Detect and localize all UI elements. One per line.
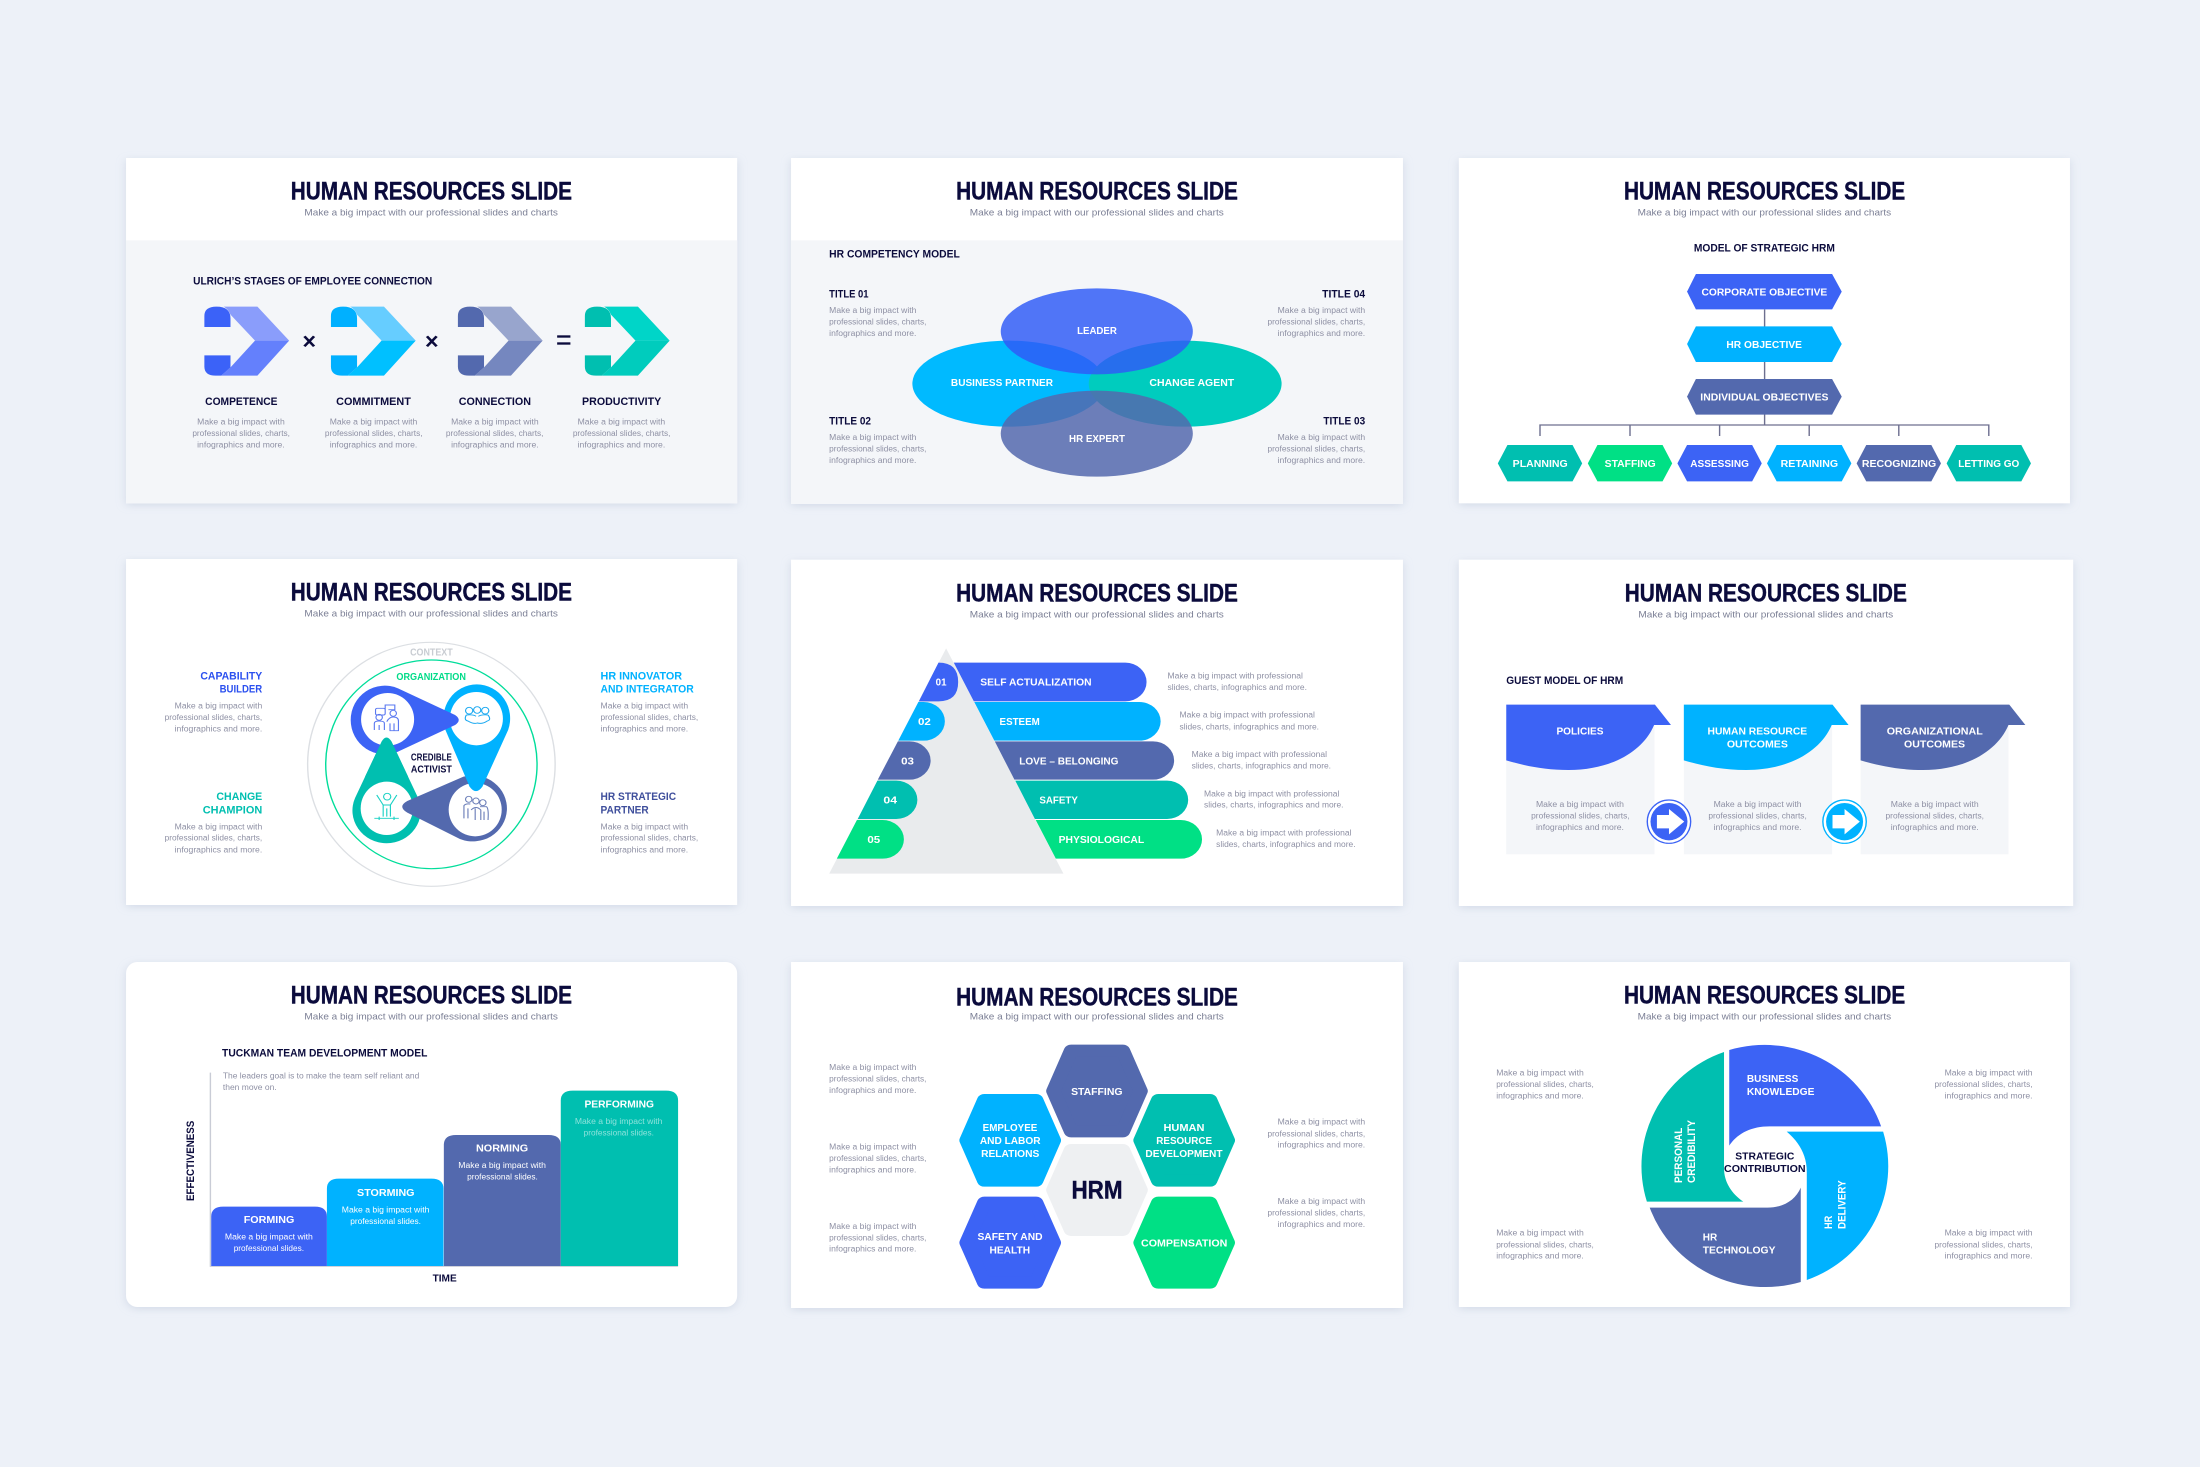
- bar: performing: professional slides.: [584, 1128, 654, 1137]
- panel: strategic contribution pinwheel: [1459, 962, 2070, 1307]
- organization label: ORGANIZATION: [396, 672, 466, 683]
- row 05 physiological: [837, 820, 1356, 859]
- icon: competence arrow: [204, 307, 289, 376]
- segment: HR delivery: HR: [1823, 1216, 1835, 1229]
- card: human resource outcomes: professional slides, charts,: [1708, 811, 1807, 820]
- left text 3: infographics and more.: [829, 1244, 916, 1253]
- commitment text: COMMITMENT: [336, 395, 412, 408]
- subtitle: Make a big impact with our professional slides and charts: [304, 208, 558, 218]
- HR strategic partner block: [601, 790, 698, 854]
- connection text: Make a big impact with: [451, 417, 539, 426]
- context ring: [308, 642, 555, 886]
- competence text: COMPETENCE: [205, 395, 278, 408]
- capability builder block: professional slides, charts,: [165, 713, 262, 722]
- change champion block: [165, 790, 262, 854]
- hexagon: human resource development: DEVELOPMENT: [1145, 1149, 1223, 1160]
- change champion block: Make a big impact with: [175, 822, 262, 831]
- bar: forming: FORMING: [244, 1215, 294, 1226]
- title: HUMAN RESOURCES SLIDE: [291, 981, 572, 1009]
- left text 3: [829, 1222, 926, 1253]
- center label: ACTIVIST: [411, 764, 452, 775]
- bar: storming: [327, 1179, 443, 1266]
- slide background: [1459, 560, 2073, 906]
- hexagon: employee and labor relations: RELATIONS: [981, 1149, 1040, 1160]
- venn diagram: BUSINESS PARTNER: [951, 378, 1054, 389]
- title 03 block: [1268, 414, 1366, 465]
- top right text: Make a big impact with: [1945, 1068, 2033, 1077]
- connection text: [446, 395, 543, 449]
- capability builder block: CAPABILITY: [200, 670, 262, 682]
- row 03 love and belonging: 03: [901, 756, 914, 767]
- y axis label: EFFECTIVENESS: [185, 1120, 197, 1201]
- segment: HR technology: TECHNOLOGY: [1703, 1246, 1776, 1256]
- bottom right text: [1935, 1228, 2033, 1260]
- context label: CONTEXT: [410, 647, 453, 658]
- right text 1: [1268, 1117, 1365, 1149]
- segment: personal credibility: [1641, 1052, 1743, 1202]
- grey content band: [791, 240, 1403, 504]
- letting go box: [1947, 445, 2031, 481]
- row 04 safety: [858, 781, 1343, 819]
- top right text: infographics and more.: [1945, 1091, 2033, 1100]
- title 02 block: infographics and more.: [829, 456, 916, 465]
- commitment text: [325, 395, 423, 449]
- top left text: Make a big impact with: [1496, 1068, 1584, 1077]
- title: HUMAN RESOURCES SLIDE: [956, 177, 1238, 205]
- title 02 block: professional slides, charts,: [829, 444, 926, 453]
- corporate objective box: CORPORATE OBJECTIVE: [1702, 288, 1828, 298]
- card: organizational outcomes: [1861, 705, 2025, 854]
- slide background: [126, 962, 737, 1307]
- top left text: professional slides, charts,: [1496, 1080, 1594, 1089]
- panel: pyramid of needs: [791, 560, 1403, 906]
- section heading: HR COMPETENCY MODEL: [829, 247, 960, 260]
- productivity text: [573, 395, 670, 449]
- row 02 esteem: 02: [918, 717, 931, 728]
- panel: HRM hexagons: [791, 962, 1403, 1308]
- center label: CONTRIBUTION: [1724, 1164, 1806, 1175]
- row 01 self actualization: SELF ACTUALIZATION: [980, 678, 1092, 688]
- letting go box: LETTING GO: [1958, 459, 2019, 470]
- subtitle: Make a big impact with our professional slides and charts: [1638, 208, 1891, 218]
- hexagon: employee and labor relations: AND LABOR: [980, 1136, 1041, 1147]
- center label: CREDIBLE: [411, 753, 452, 763]
- subtitle: Make a big impact with our professional slides and charts: [304, 609, 558, 619]
- icon: connection arrow: [458, 307, 543, 376]
- hexagon: HRM center: HRM: [1071, 1176, 1123, 1204]
- left text 1: professional slides, charts,: [829, 1074, 926, 1083]
- assessing box: [1677, 445, 1762, 481]
- HR innovator block: [601, 670, 698, 733]
- slide background: [1459, 962, 2070, 1307]
- capability builder block: BUILDER: [220, 683, 263, 695]
- commitment text: Make a big impact with: [330, 417, 417, 426]
- connector lines: [1540, 309, 1989, 436]
- slide background: [126, 559, 737, 905]
- left text 2: professional slides, charts,: [829, 1154, 926, 1163]
- HR innovator block: professional slides, charts,: [601, 713, 698, 722]
- connection text: CONNECTION: [459, 395, 531, 408]
- change champion block: CHAMPION: [203, 803, 262, 816]
- row 02 esteem: Make a big impact with professional: [1180, 710, 1315, 719]
- bar: norming: professional slides.: [467, 1172, 538, 1181]
- segment: business knowledge: [1729, 1045, 1881, 1146]
- top right text: professional slides, charts,: [1935, 1080, 2033, 1089]
- center label: [411, 753, 452, 775]
- productivity text: Make a big impact with: [578, 417, 665, 426]
- arrow: outcomes to organization: [1823, 800, 1866, 843]
- planning box: PLANNING: [1513, 459, 1568, 470]
- title: HUMAN RESOURCES SLIDE: [956, 579, 1238, 607]
- operators: [304, 335, 570, 346]
- bottom left text: infographics and more.: [1496, 1251, 1584, 1260]
- change champion block: professional slides, charts,: [165, 833, 262, 842]
- title 01 block: [829, 287, 926, 338]
- title: HUMAN RESOURCES SLIDE: [1624, 981, 1905, 1009]
- icon: productivity arrow: [585, 307, 670, 376]
- HR strategic partner block: HR STRATEGIC: [601, 790, 676, 803]
- subtitle: Make a big impact with our professional slides and charts: [970, 208, 1224, 218]
- title 04 block: TITLE 04: [1322, 287, 1366, 300]
- hexagon: compensation: [1141, 1203, 1228, 1283]
- title: HUMAN RESOURCES SLIDE: [1624, 177, 1905, 205]
- teardrop: teal: [352, 737, 421, 843]
- row 02 esteem: ESTEEM: [1000, 717, 1040, 728]
- description: The leaders goal is to make the team self reliant and: [223, 1071, 419, 1080]
- segment: personal credibility: PERSONAL: [1674, 1128, 1685, 1183]
- staffing box: [1588, 445, 1672, 481]
- title 03 block: Make a big impact with: [1278, 433, 1365, 442]
- slide background: [1459, 158, 2070, 503]
- capability builder block: [165, 670, 263, 733]
- slide background: [791, 962, 1403, 1308]
- competence text: professional slides, charts,: [192, 429, 290, 438]
- HR strategic partner block: infographics and more.: [601, 845, 688, 854]
- title 03 block: infographics and more.: [1278, 456, 1365, 465]
- bar: norming: NORMING: [476, 1143, 528, 1154]
- description: [223, 1071, 419, 1092]
- grey content band: [126, 240, 737, 503]
- title 03 block: professional slides, charts,: [1268, 444, 1365, 453]
- card: organizational outcomes: ORGANIZATIONAL: [1887, 727, 1983, 737]
- hexagon: compensation: COMPENSATION: [1141, 1239, 1227, 1249]
- hexagon: staffing: [1053, 1051, 1141, 1131]
- individual objectives box: INDIVIDUAL OBJECTIVES: [1700, 393, 1829, 403]
- row 03 love and belonging: slides, charts, infographics and more.: [1192, 761, 1331, 770]
- connection text: infographics and more.: [451, 440, 539, 449]
- capability builder block: infographics and more.: [175, 724, 262, 733]
- commitment text: professional slides, charts,: [325, 429, 423, 438]
- right text 2: Make a big impact with: [1278, 1197, 1365, 1206]
- title 01 block: infographics and more.: [829, 329, 916, 338]
- segment: personal credibility: CREDIBILITY: [1686, 1120, 1698, 1183]
- row 01 self actualization: [919, 663, 1307, 701]
- HR innovator block: infographics and more.: [601, 724, 688, 733]
- panel: HR competency model: [791, 158, 1403, 504]
- retaining box: [1767, 445, 1851, 481]
- top left text: infographics and more.: [1496, 1091, 1584, 1100]
- title 01 block: TITLE 01: [829, 287, 869, 300]
- card: policies: professional slides, charts,: [1531, 811, 1630, 820]
- competence text: infographics and more.: [197, 440, 285, 449]
- slide background: [791, 560, 1403, 906]
- section heading: MODEL OF STRATEGIC HRM: [1694, 241, 1835, 254]
- left text 2: infographics and more.: [829, 1165, 916, 1174]
- HR objective box: [1687, 326, 1842, 362]
- row 03 love and belonging: Make a big impact with professional: [1192, 750, 1327, 759]
- retaining box: RETAINING: [1781, 459, 1838, 470]
- title 04 block: professional slides, charts,: [1268, 317, 1365, 326]
- recognizing box: [1857, 445, 1941, 481]
- bar: performing: PERFORMING: [584, 1100, 654, 1110]
- teardrop: navy: [402, 775, 507, 841]
- organization ring: [326, 660, 537, 869]
- bar: storming: professional slides.: [350, 1217, 421, 1226]
- row 04 safety: 04: [883, 796, 898, 806]
- hexagon: safety and health: SAFETY AND: [977, 1232, 1043, 1243]
- hexagon: safety and health: HEALTH: [990, 1245, 1030, 1256]
- right text 1: infographics and more.: [1278, 1140, 1365, 1149]
- card: policies: POLICIES: [1556, 727, 1604, 737]
- card: human resource outcomes: infographics and more.: [1714, 823, 1802, 832]
- row 01 self actualization: 01: [936, 678, 947, 688]
- hexagon: employee and labor relations: EMPLOYEE: [983, 1123, 1038, 1134]
- HR strategic partner block: Make a big impact with: [601, 822, 688, 831]
- left text 1: Make a big impact with: [829, 1063, 916, 1072]
- bar: storming: Make a big impact with: [342, 1205, 429, 1214]
- panel: Tuckman team development model: [126, 962, 737, 1307]
- slide background: [126, 158, 737, 503]
- card: organizational outcomes: Make a big impact with: [1891, 800, 1979, 809]
- card: human resource outcomes: Make a big impact with: [1714, 800, 1802, 809]
- icon: commitment arrow: [331, 307, 416, 376]
- title: HUMAN RESOURCES SLIDE: [291, 578, 572, 606]
- hexagon: safety and health: [967, 1203, 1054, 1283]
- card: organizational outcomes: infographics and more.: [1891, 823, 1979, 832]
- productivity text: professional slides, charts,: [573, 429, 670, 438]
- title 04 block: infographics and more.: [1278, 329, 1365, 338]
- row 04 safety: SAFETY: [1039, 796, 1078, 806]
- venn diagram: [912, 288, 1282, 477]
- recognizing box: RECOGNIZING: [1862, 459, 1936, 470]
- productivity text: infographics and more.: [578, 440, 665, 449]
- bar: forming: Make a big impact with: [225, 1232, 313, 1241]
- right text 1: professional slides, charts,: [1268, 1129, 1365, 1138]
- HR strategic partner block: professional slides, charts,: [601, 833, 698, 842]
- panel: HR competency circles: [126, 559, 737, 905]
- bottom left text: Make a big impact with: [1496, 1228, 1584, 1237]
- assessing box: ASSESSING: [1690, 459, 1749, 470]
- title 01 block: professional slides, charts,: [829, 317, 926, 326]
- hexagon: human resource development: RESOURCE: [1156, 1136, 1212, 1147]
- bottom left text: professional slides, charts,: [1496, 1240, 1594, 1249]
- row 01 self actualization: Make a big impact with professional: [1168, 671, 1303, 680]
- title 01 block: Make a big impact with: [829, 306, 916, 315]
- bar: norming: Make a big impact with: [458, 1161, 546, 1170]
- HR objective box: HR OBJECTIVE: [1726, 340, 1802, 351]
- title 03 block: TITLE 03: [1323, 414, 1366, 427]
- segment: HR technology: HR: [1703, 1233, 1718, 1243]
- competence text: [192, 395, 290, 449]
- title 02 block: Make a big impact with: [829, 433, 916, 442]
- bottom right text: Make a big impact with: [1945, 1228, 2033, 1237]
- bar: norming: [444, 1135, 561, 1266]
- center label: STRATEGIC: [1735, 1151, 1794, 1162]
- subtitle: Make a big impact with our professional slides and charts: [304, 1012, 558, 1022]
- teardrop: blue: [351, 686, 459, 754]
- HR innovator block: AND INTEGRATOR: [601, 683, 694, 695]
- icon: person with raised arms: [374, 793, 399, 820]
- title 02 block: [829, 414, 926, 465]
- hexagon: HRM center: [1053, 1150, 1141, 1230]
- HR innovator block: Make a big impact with: [601, 701, 688, 710]
- right text 2: infographics and more.: [1278, 1220, 1365, 1229]
- hexagon: employee and labor relations: [967, 1100, 1054, 1181]
- teal tip overlap: [365, 737, 408, 777]
- chart axes: [210, 1073, 678, 1266]
- hexagon: staffing: STAFFING: [1071, 1087, 1123, 1098]
- venn diagram: CHANGE AGENT: [1149, 378, 1234, 389]
- bar: forming: [211, 1207, 327, 1266]
- section heading: GUEST MODEL OF HRM: [1506, 674, 1623, 687]
- individual objectives box: [1687, 379, 1842, 415]
- card: human resource outcomes: [1684, 705, 1849, 854]
- card: human resource outcomes: HUMAN RESOURCE: [1708, 727, 1808, 737]
- subtitle: Make a big impact with our professional slides and charts: [1638, 610, 1893, 620]
- left text 2: [829, 1142, 926, 1174]
- row 02 esteem: slides, charts, infographics and more.: [1180, 722, 1319, 731]
- arrow: policies to outcomes: [1647, 800, 1691, 843]
- right text 1: Make a big impact with: [1278, 1117, 1365, 1126]
- bar: forming: professional slides.: [234, 1244, 304, 1253]
- right text 2: [1268, 1197, 1365, 1229]
- change champion block: infographics and more.: [175, 845, 262, 854]
- venn diagram: LEADER: [1077, 326, 1117, 337]
- productivity text: PRODUCTIVITY: [582, 395, 661, 408]
- description: then move on.: [223, 1083, 277, 1092]
- row 05 physiological: PHYSIOLOGICAL: [1059, 835, 1144, 846]
- card: policies: infographics and more.: [1536, 823, 1624, 832]
- card: policies: Make a big impact with: [1536, 800, 1624, 809]
- top left text: [1496, 1068, 1594, 1100]
- section heading: TUCKMAN TEAM DEVELOPMENT MODEL: [222, 1046, 427, 1059]
- icon: people talking: [374, 705, 398, 731]
- competence text: Make a big impact with: [197, 417, 285, 426]
- row 01 self actualization: slides, charts, infographics and more.: [1168, 683, 1307, 692]
- bottom right text: professional slides, charts,: [1935, 1240, 2033, 1249]
- x axis label: TIME: [433, 1273, 457, 1284]
- commitment text: infographics and more.: [330, 440, 417, 449]
- panel: model of strategic HRM: [1459, 158, 2070, 503]
- segment: business knowledge: BUSINESS: [1747, 1074, 1799, 1085]
- panel: Guest model of HRM: [1459, 560, 2073, 906]
- row 02 esteem: [898, 702, 1319, 741]
- planning box: [1498, 445, 1582, 481]
- teardrop: cyan: [443, 684, 510, 791]
- segment: HR delivery: DELIVERY: [1837, 1180, 1849, 1229]
- row 03 love and belonging: [878, 741, 1331, 780]
- bottom left text: [1496, 1228, 1594, 1260]
- row 05 physiological: 05: [867, 835, 881, 846]
- bar: performing: [561, 1091, 678, 1266]
- row 05 physiological: Make a big impact with professional: [1216, 828, 1352, 837]
- bar: performing: Make a big impact with: [575, 1117, 662, 1126]
- corporate objective box: [1687, 274, 1842, 309]
- left text 1: infographics and more.: [829, 1086, 916, 1095]
- bottom right text: infographics and more.: [1945, 1251, 2033, 1260]
- section heading: ULRICH’S STAGES OF EMPLOYEE CONNECTION: [193, 274, 432, 287]
- connection text: professional slides, charts,: [446, 429, 543, 438]
- subtitle: Make a big impact with our professional slides and charts: [1638, 1012, 1891, 1022]
- hexagon: human resource development: [1141, 1100, 1228, 1181]
- segment: business knowledge: KNOWLEDGE: [1747, 1087, 1815, 1098]
- segment: HR technology: [1650, 1188, 1801, 1287]
- panel: Ulrich's stages of employee connection: [126, 158, 737, 503]
- row 04 safety: Make a big impact with professional: [1204, 789, 1339, 798]
- card: organizational outcomes: professional slides, charts,: [1886, 811, 1984, 820]
- subtitle: Make a big impact with our professional slides and charts: [970, 1012, 1224, 1022]
- card: organizational outcomes: OUTCOMES: [1904, 740, 1965, 750]
- left text 1: [829, 1063, 926, 1095]
- venn diagram: HR EXPERT: [1069, 434, 1125, 445]
- row 03 love and belonging: LOVE – BELONGING: [1019, 756, 1119, 767]
- segment: HR delivery: [1787, 1132, 1888, 1280]
- left text 3: Make a big impact with: [829, 1222, 916, 1231]
- staffing box: STAFFING: [1605, 459, 1656, 470]
- subtitle: Make a big impact with our professional slides and charts: [970, 610, 1224, 620]
- title 04 block: Make a big impact with: [1278, 306, 1365, 315]
- icon: standing group: [464, 796, 488, 820]
- title 02 block: TITLE 02: [829, 414, 871, 427]
- card: human resource outcomes: OUTCOMES: [1727, 740, 1788, 750]
- row 04 safety: slides, charts, infographics and more.: [1204, 800, 1343, 809]
- hexagon: human resource development: HUMAN: [1163, 1123, 1204, 1134]
- left text 2: Make a big impact with: [829, 1142, 916, 1151]
- capability builder block: Make a big impact with: [175, 701, 262, 710]
- row 05 physiological: slides, charts, infographics and more.: [1216, 840, 1356, 849]
- icon: team group: [465, 707, 490, 723]
- title: HUMAN RESOURCES SLIDE: [1625, 579, 1907, 607]
- top right text: [1935, 1068, 2033, 1100]
- left text 3: professional slides, charts,: [829, 1233, 926, 1242]
- HR innovator block: HR INNOVATOR: [601, 670, 683, 682]
- HR strategic partner block: PARTNER: [601, 803, 649, 816]
- title: HUMAN RESOURCES SLIDE: [291, 177, 572, 205]
- right text 2: professional slides, charts,: [1268, 1208, 1365, 1217]
- title: HUMAN RESOURCES SLIDE: [956, 983, 1238, 1011]
- change champion block: CHANGE: [216, 790, 262, 803]
- center label: [1724, 1151, 1806, 1175]
- bar: storming: STORMING: [357, 1188, 415, 1199]
- title 04 block: [1268, 287, 1366, 338]
- slide background: [791, 158, 1403, 504]
- pyramid triangle: [829, 648, 1063, 874]
- card: policies: [1506, 705, 1671, 854]
